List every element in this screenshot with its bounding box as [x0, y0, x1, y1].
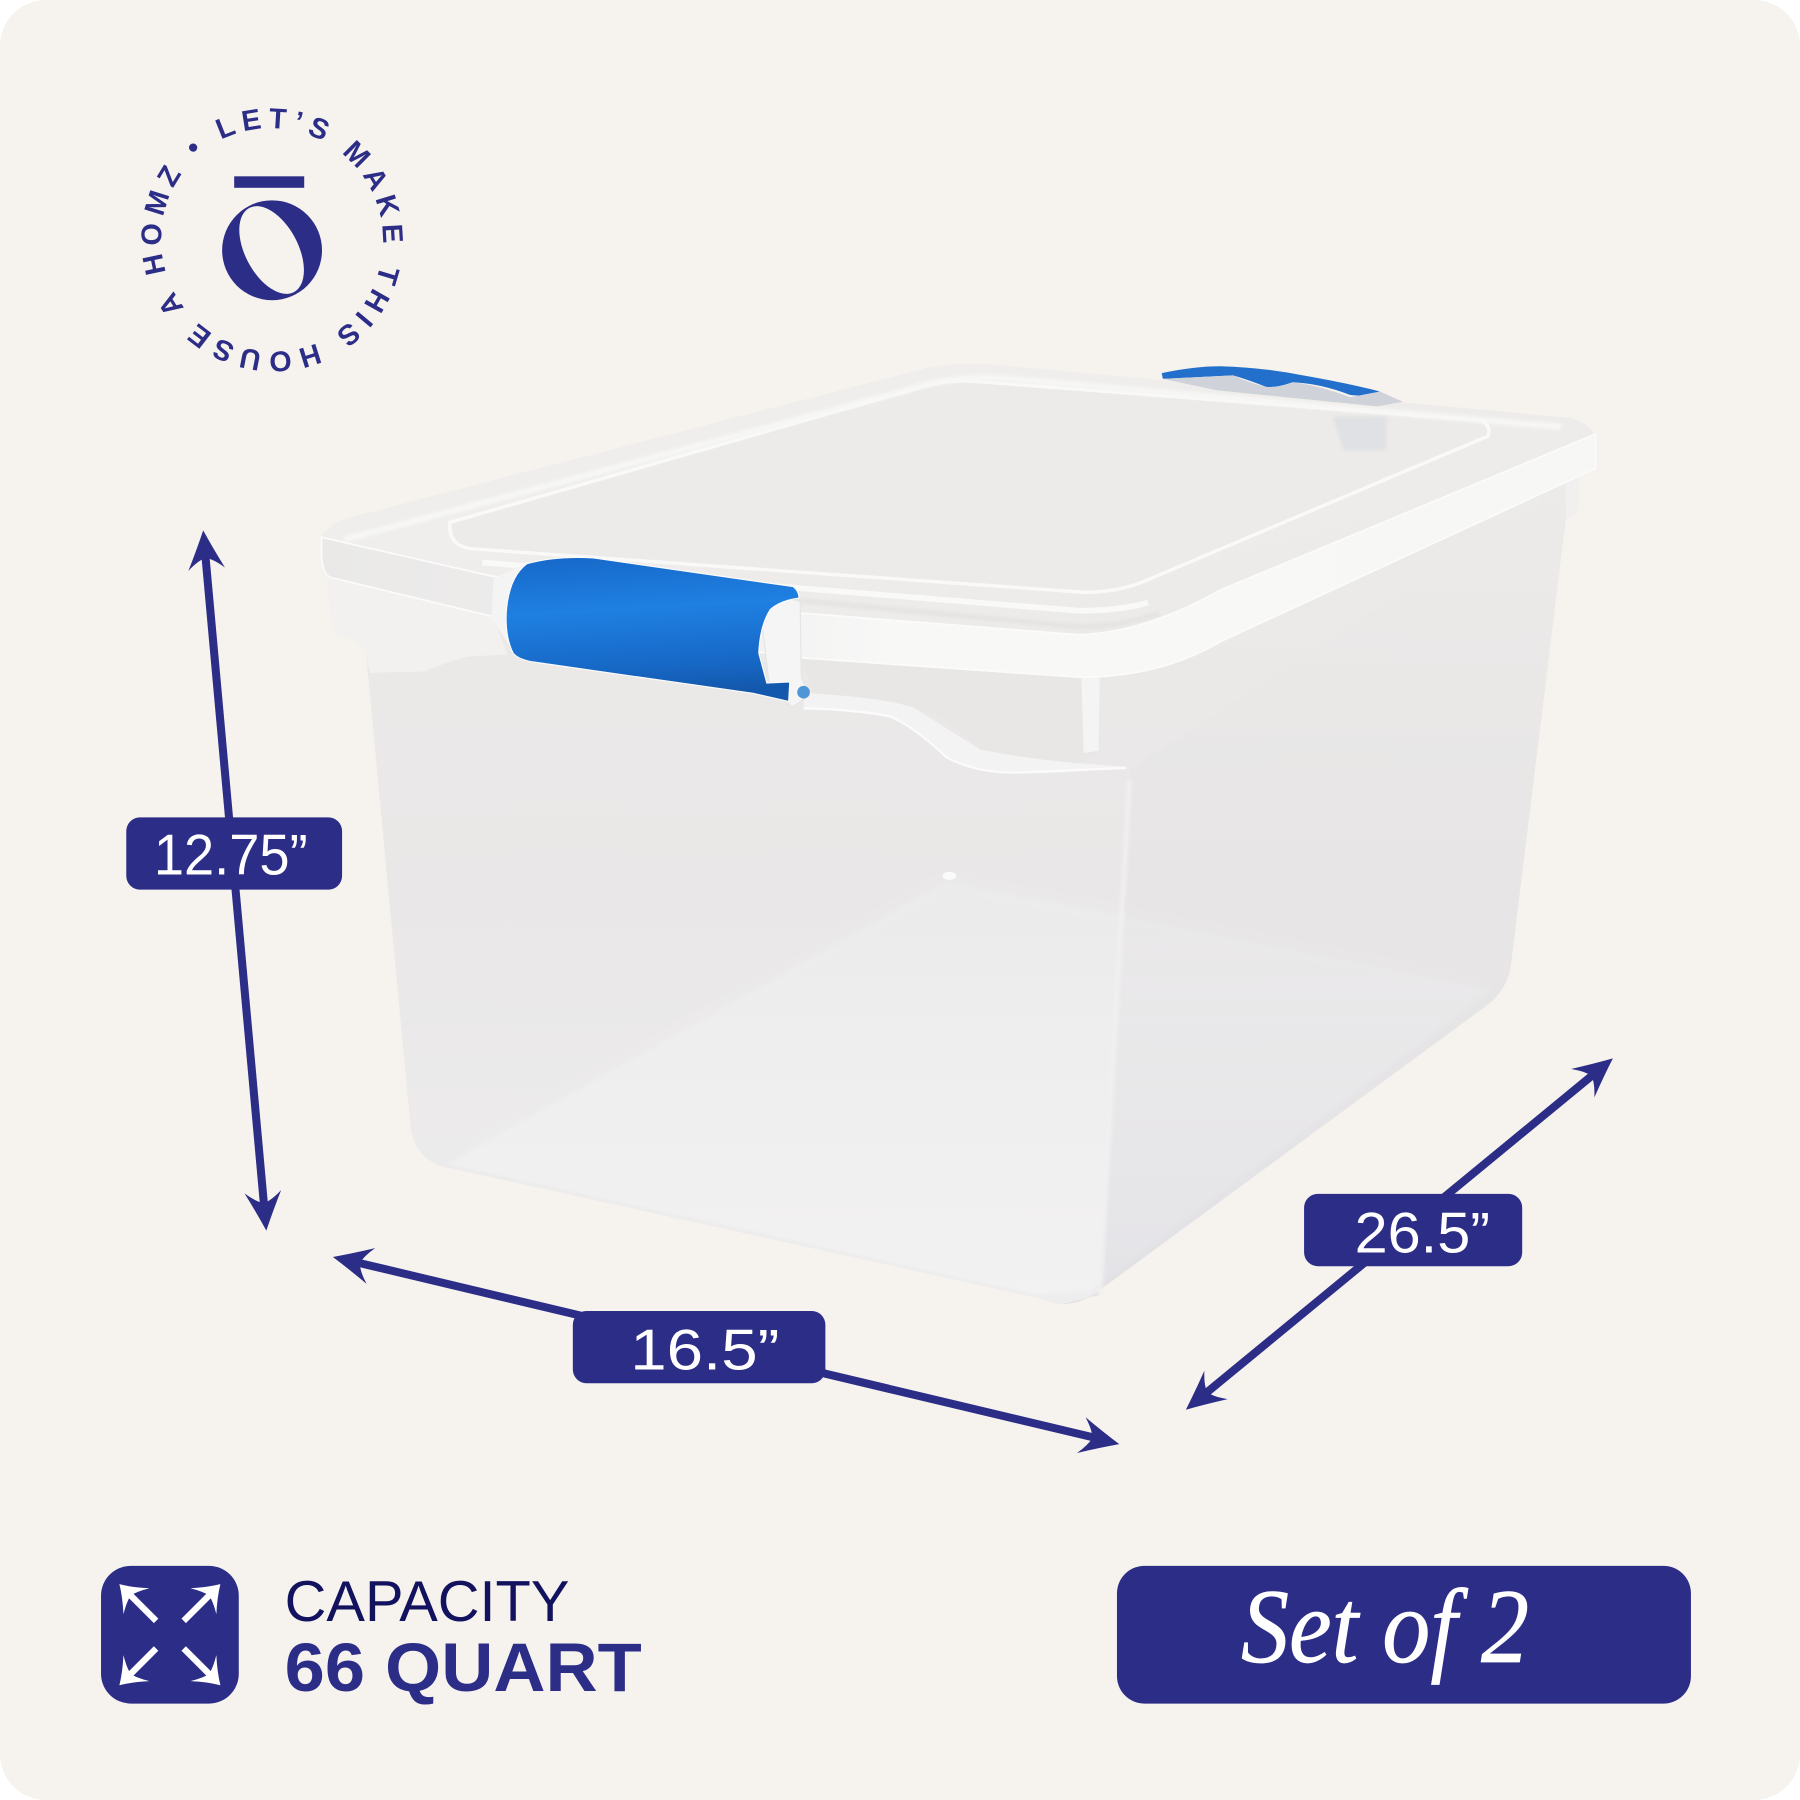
set of 2 badge	[1117, 1566, 1691, 1704]
capacity value: 66 QUART	[285, 1629, 642, 1706]
front handle recess	[800, 654, 1128, 774]
logo macron bar	[234, 176, 304, 188]
bin corner edge	[1100, 781, 1130, 1295]
bin floor seen through	[448, 882, 1492, 1295]
dimension: width 16.5	[329, 1239, 1124, 1462]
depth label: 26.5”	[1355, 1201, 1490, 1265]
lid top	[321, 364, 1596, 677]
lid raised panel	[450, 381, 1489, 592]
right lip	[1566, 475, 1580, 519]
latch rivet	[797, 686, 810, 699]
capacity label: CAPACITY	[285, 1570, 569, 1634]
dimension: height 12.75	[126, 529, 342, 1232]
front latch clip	[506, 557, 799, 701]
logo circular slogan: LET’S MAKE THIS HOUSE A HOMZ •	[141, 108, 403, 372]
depth label	[1304, 1194, 1522, 1266]
width label	[573, 1311, 825, 1383]
set of 2 badge: Set of 2	[1241, 1568, 1529, 1685]
capacity block	[101, 1566, 642, 1706]
product photo: clear storage bin	[321, 364, 1596, 1304]
logo ring letter	[222, 196, 322, 304]
lid front rim	[321, 434, 1596, 677]
logo badge	[141, 108, 403, 372]
bin body	[365, 482, 1570, 1304]
width label: 16.5”	[630, 1319, 779, 1383]
left handle recess	[326, 574, 507, 673]
dimension: depth 26.5	[1174, 1044, 1625, 1424]
width arrow	[329, 1239, 1124, 1462]
height label: 12.75”	[154, 824, 308, 888]
front latch clear hinge	[760, 599, 809, 707]
back latch clip	[1162, 366, 1403, 450]
height arrow	[185, 529, 285, 1232]
left latch collar	[491, 562, 528, 650]
depth arrow	[1174, 1044, 1625, 1424]
bin right wall	[1062, 482, 1570, 1304]
icon: expand arrows	[101, 1566, 239, 1704]
height label	[126, 817, 342, 890]
